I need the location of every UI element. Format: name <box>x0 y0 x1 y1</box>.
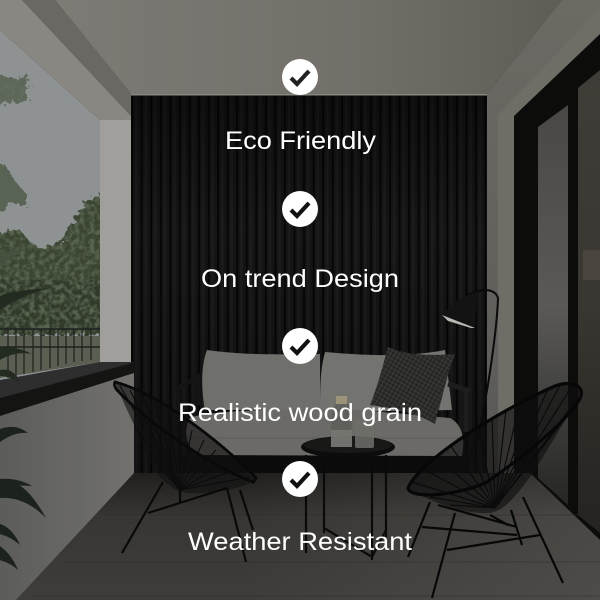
feature: realistic wood grain <box>178 328 422 427</box>
palm leaves <box>0 249 48 570</box>
beam faces <box>0 0 131 120</box>
check icon <box>282 328 318 364</box>
door frame <box>514 34 600 562</box>
label: On trend Design <box>201 265 399 293</box>
sofa back cushion left <box>202 350 320 410</box>
sofa armrest left <box>175 377 198 425</box>
sky <box>0 30 100 395</box>
parapet wall <box>0 373 134 600</box>
column <box>100 120 131 363</box>
railing <box>0 329 100 378</box>
sofa base <box>180 455 470 473</box>
door glass right <box>578 70 600 533</box>
door glass left <box>538 105 568 505</box>
feature: weather resistant <box>188 461 412 556</box>
sofa back cushion right <box>320 350 452 412</box>
sofa seat <box>186 409 463 456</box>
feature: eco friendly <box>225 59 377 155</box>
left chair <box>114 382 256 562</box>
parapet cap <box>0 363 135 416</box>
slatted feature wall <box>131 94 487 476</box>
pillow <box>370 347 455 424</box>
label: Weather Resistant <box>188 528 412 556</box>
check icon <box>282 59 318 95</box>
floor lamp <box>442 290 498 440</box>
check icon <box>282 461 318 497</box>
right chair <box>408 384 581 598</box>
check icon <box>282 191 318 227</box>
glass <box>355 420 374 448</box>
side table <box>301 396 395 560</box>
ceiling <box>55 0 562 94</box>
sofa <box>175 347 470 473</box>
trees outside <box>0 74 102 335</box>
floor <box>16 473 600 600</box>
ground behind railing <box>0 336 100 378</box>
label: Realistic wood grain <box>178 399 422 427</box>
label: Eco Friendly <box>225 127 377 155</box>
right wall <box>487 0 600 600</box>
sofa armrest right <box>448 384 470 432</box>
bottle <box>331 396 352 447</box>
feature: on trend design <box>201 191 399 293</box>
